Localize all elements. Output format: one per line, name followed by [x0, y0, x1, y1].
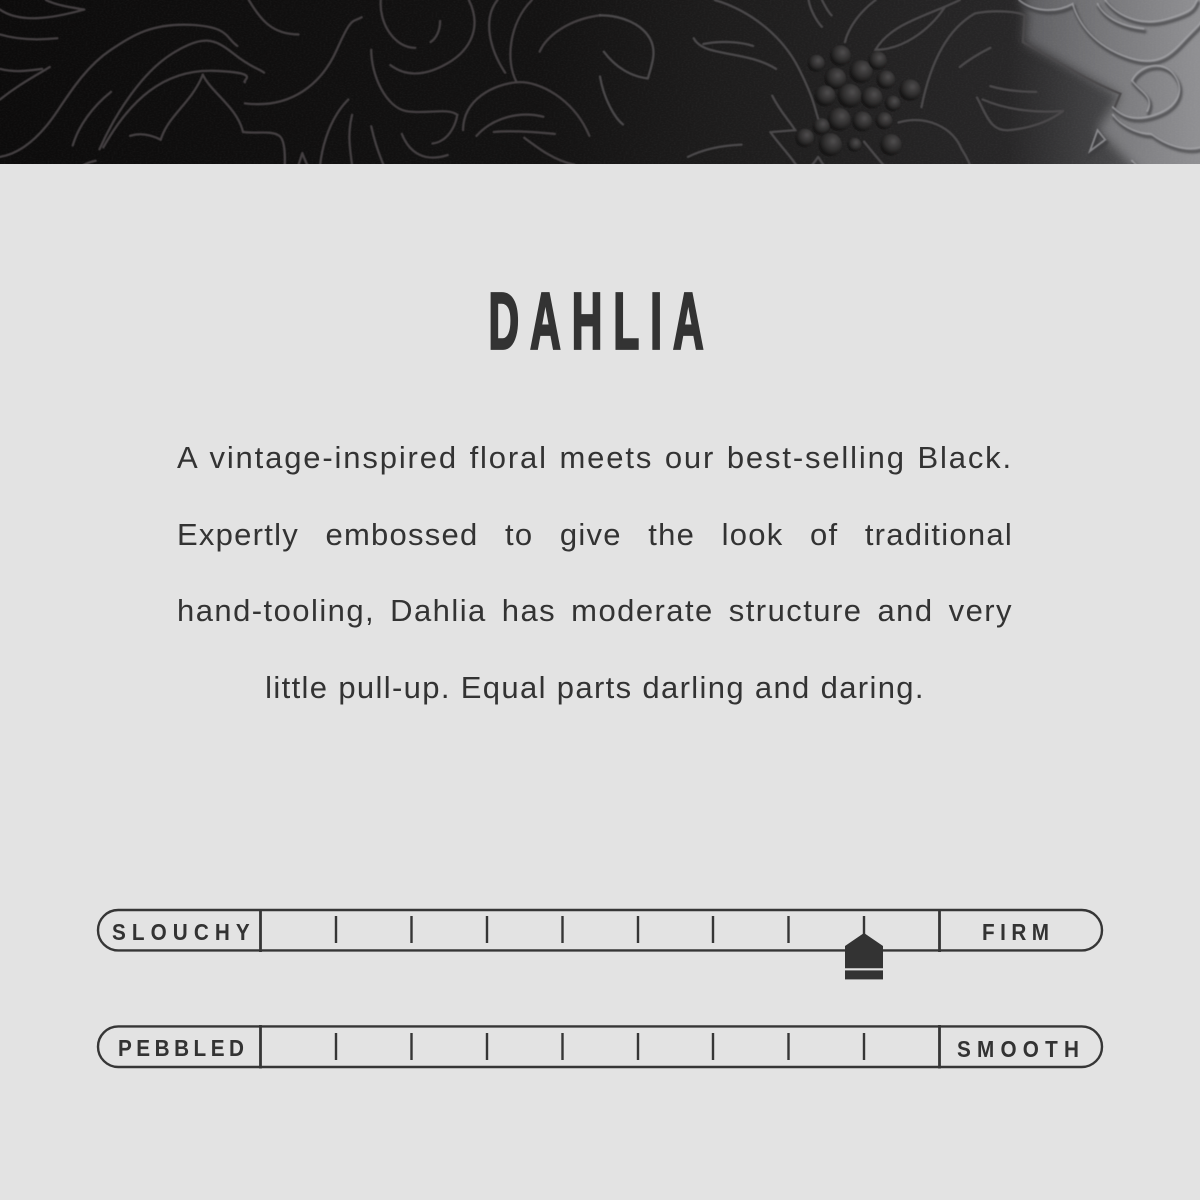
body text block: Expertly embossed to give the look of traditional	[177, 517, 1013, 552]
label: firm: FIRM	[982, 919, 1049, 945]
slider dividers and ticks	[260, 909, 940, 952]
label: pebbled: PEBBLED	[118, 1035, 244, 1061]
title: DAHLIA	[488, 276, 704, 366]
slider track outline	[98, 910, 1102, 950]
right half relief lines and berries	[600, 0, 1200, 191]
slider: slouchy to firm	[96, 908, 1104, 980]
slider: pebbled to smooth	[96, 1025, 1104, 1068]
left half relief lines	[0, 0, 600, 188]
marker: position indicator	[845, 933, 883, 979]
body text block: hand-tooling, Dahlia has moderate structure and very	[177, 593, 1013, 628]
label: smooth: SMOOTH	[957, 1036, 1079, 1062]
body text block: A vintage-inspired floral meets our best-selling Black.	[177, 440, 1013, 475]
slider dividers and ticks	[260, 1025, 940, 1068]
label: slouchy: SLOUCHY	[112, 919, 250, 945]
body text block	[177, 440, 1013, 705]
banner: embossed black leather floral texture	[0, 0, 1200, 164]
light leather at right	[1021, 0, 1200, 199]
body text block: little pull-up. Equal parts darling and daring.	[265, 670, 925, 705]
slider track outline	[98, 1026, 1102, 1067]
